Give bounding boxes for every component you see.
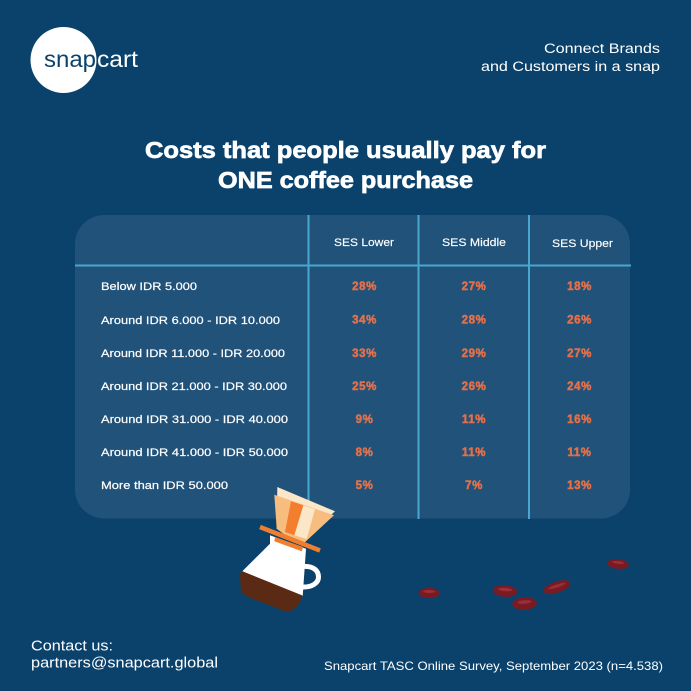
row labels: Around IDR 31.000 - IDR 40.000	[101, 414, 288, 426]
icon: coffee beans	[418, 558, 629, 611]
tagline: Connect Brands	[544, 41, 660, 56]
values: SES Middle: 26%	[462, 381, 486, 393]
contact details: Contact us:	[31, 638, 113, 654]
tagline: and Customers in a snap	[481, 59, 660, 74]
contact details: partners@snapcart.global	[31, 656, 218, 672]
values: SES Lower: 5%	[356, 480, 373, 492]
logo: snapcart: snap	[44, 46, 96, 72]
column headers	[334, 237, 613, 250]
row labels: Around IDR 21.000 - IDR 30.000	[101, 381, 287, 393]
values: SES Upper: 13%	[567, 480, 592, 492]
logo: snapcart	[30, 27, 139, 93]
values: SES Middle: 11%	[462, 414, 486, 426]
column headers: SES Upper	[552, 238, 613, 250]
values: SES Middle: 11%	[462, 447, 486, 459]
row labels: Around IDR 41.000 - IDR 50.000	[101, 447, 288, 459]
values: SES Lower: 33%	[352, 348, 377, 360]
values: SES Lower: 34%	[352, 314, 377, 326]
column headers: SES Middle	[442, 237, 506, 249]
values: SES Upper: 16%	[567, 414, 592, 426]
contact details	[31, 638, 218, 672]
values: SES Upper: 26%	[567, 314, 592, 326]
source note: Snapcart TASC Online Survey, September 2023 (n=4.538)	[324, 659, 663, 673]
row labels: Below IDR 5.000	[101, 281, 197, 293]
tagline	[481, 41, 660, 74]
title: ONE coffee purchase	[218, 167, 473, 193]
values: SES Middle	[462, 281, 486, 492]
panel: price table	[75, 215, 631, 519]
values: SES Lower: 28%	[352, 281, 377, 293]
values: SES Upper: 18%	[567, 281, 592, 293]
title	[145, 137, 546, 193]
values: SES Middle: 29%	[462, 348, 486, 360]
values: SES Lower	[352, 281, 377, 492]
values: SES Middle: 27%	[462, 281, 486, 293]
values: SES Upper: 27%	[567, 348, 592, 360]
values: SES Upper	[567, 281, 592, 492]
column headers: SES Lower	[334, 237, 394, 249]
values: SES Lower: 8%	[356, 447, 373, 459]
row labels: Around IDR 11.000 - IDR 20.000	[101, 348, 285, 360]
values: SES Middle: 28%	[462, 314, 486, 326]
values: SES Upper: 24%	[567, 381, 592, 393]
row labels: Around IDR 6.000 - IDR 10.000	[101, 315, 280, 327]
row labels	[101, 281, 288, 492]
title: Costs that people usually pay for	[145, 137, 546, 163]
row labels: More than IDR 50.000	[101, 480, 228, 492]
values: SES Middle: 7%	[465, 480, 483, 492]
table grid lines	[75, 215, 631, 519]
values: SES Lower: 25%	[352, 381, 377, 393]
values: SES Lower: 9%	[356, 414, 373, 426]
table background	[75, 215, 630, 518]
logo: snapcart: cart	[97, 46, 139, 72]
icon: coffee dripper and carafe	[240, 487, 335, 611]
values: SES Upper: 11%	[567, 447, 592, 459]
